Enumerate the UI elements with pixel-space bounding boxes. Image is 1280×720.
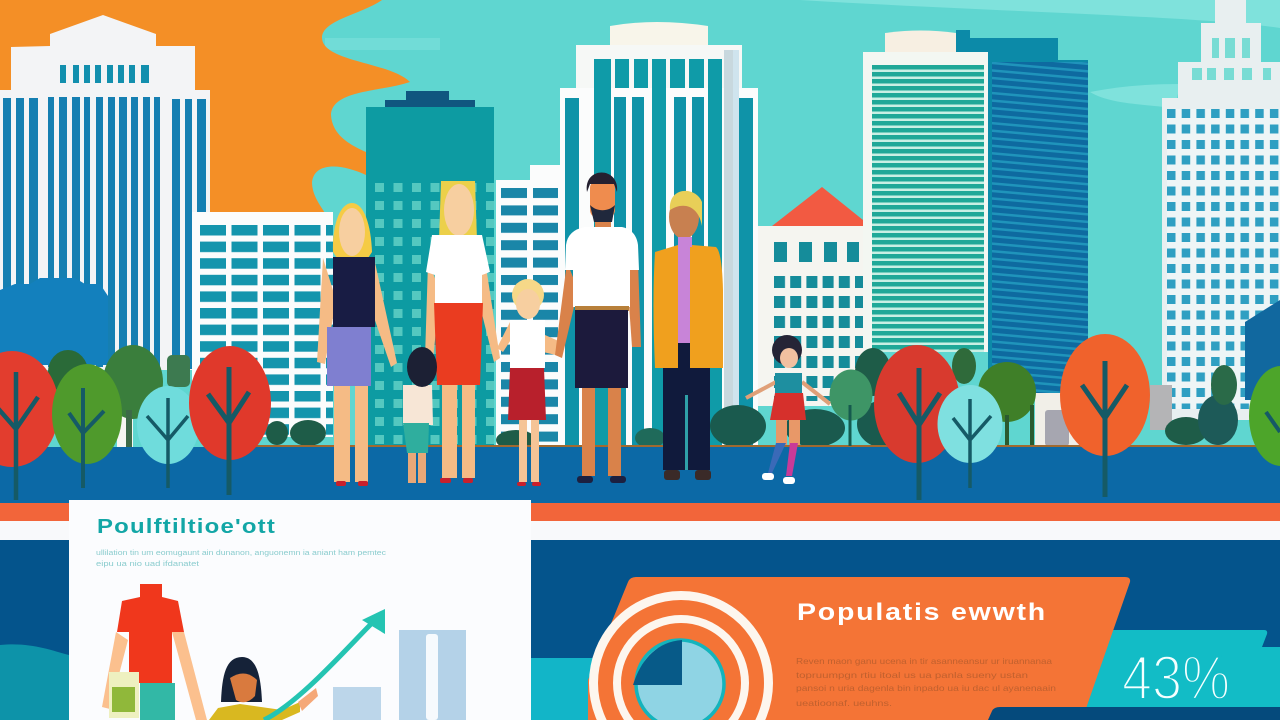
text block: population description: Reven maon ganu ucena in tir asanneansur ur iruannanaa bbox=[796, 656, 1052, 666]
building: white narrow block bbox=[496, 165, 562, 450]
building: striped central tower bbox=[560, 22, 758, 450]
person: small girl with spread arms bbox=[746, 335, 830, 484]
building: low blue block bbox=[0, 278, 108, 365]
person: girl in yellow shirt bbox=[209, 657, 318, 720]
trees left bbox=[0, 346, 271, 500]
building: white right tower bbox=[1162, 0, 1280, 420]
teal band right bbox=[531, 658, 601, 720]
chart: concentric ring pie bbox=[594, 596, 768, 720]
heading: report title: Poulftiltioe'ott bbox=[97, 516, 276, 538]
ground bbox=[0, 445, 1280, 503]
sky background bbox=[0, 0, 1280, 503]
trees right bbox=[830, 334, 1280, 500]
text block: report description: eipu ua nio uad ifdanatet bbox=[96, 561, 199, 568]
building: blue far right bbox=[1245, 300, 1280, 400]
text block: population description bbox=[796, 656, 1056, 708]
navy lower background bbox=[0, 540, 1280, 720]
person: figure in orange jacket bbox=[654, 191, 723, 480]
panel: orange population card bbox=[588, 577, 1130, 720]
white stripe bbox=[0, 521, 1280, 540]
text block: report description: ullilation tin um eomugaunt ain dunanon, anguonemn ia aniant ham pemtec bbox=[96, 550, 387, 557]
building bases bbox=[117, 385, 1172, 447]
dark navy bar bbox=[988, 707, 1280, 720]
arrow: rising trend bbox=[264, 609, 385, 720]
building: dark blue side tower bbox=[956, 30, 1088, 395]
panel: white report card bbox=[69, 500, 531, 720]
sky cloud streaks bbox=[325, 0, 1280, 108]
teal tag: percentage bbox=[1060, 630, 1280, 720]
chart: tall bar bbox=[399, 630, 466, 720]
text block: population description: ueatioonaf. ueuhns. bbox=[796, 698, 892, 708]
text block: population description: pansoi n uria dagenla bin inpado ua iu dac ul ayanenaain bbox=[796, 683, 1056, 693]
orange sun shape bbox=[0, 0, 410, 213]
person: man in white shirt bbox=[555, 172, 641, 483]
person: woman in blue skirt bbox=[317, 203, 397, 486]
chart: small bar bbox=[333, 687, 381, 720]
text block: report description bbox=[96, 550, 387, 568]
person: dark haired toddler bbox=[403, 347, 437, 483]
stat: 43 percent: 43% bbox=[1122, 644, 1230, 713]
building: teal tower bbox=[366, 91, 494, 450]
person: adult in red shirt bbox=[102, 584, 207, 720]
person: woman in red skirt bbox=[425, 181, 500, 483]
text block: population description: topruumpgn rtiu itoal us ua panla sueny ustan bbox=[796, 670, 1028, 680]
orange stripe bbox=[0, 503, 1280, 521]
person: blonde child in red skirt bbox=[497, 279, 563, 486]
teal band left bbox=[0, 644, 69, 720]
building: blue tower left bbox=[0, 15, 210, 370]
building: white block with windows bbox=[192, 212, 333, 437]
building: green glass tower bbox=[863, 30, 988, 352]
building: red roof block bbox=[758, 187, 868, 406]
heading: population growth: Populatis ewwth bbox=[797, 599, 1047, 626]
bushes and background trees bbox=[48, 345, 1238, 450]
